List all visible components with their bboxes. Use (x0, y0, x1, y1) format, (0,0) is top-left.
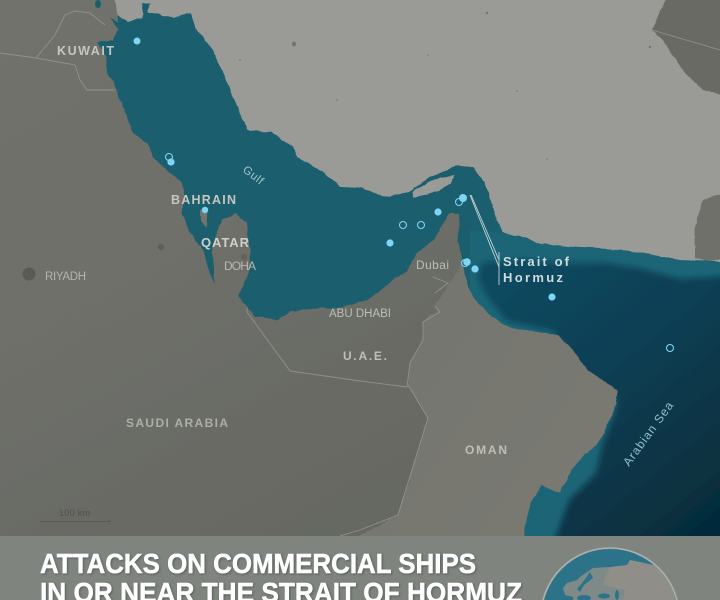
city: Riyadh urban area (22, 268, 36, 280)
label: RIYADH: RIYADH (45, 271, 86, 283)
title: ATTACKS ON COMMERCIAL SHIPS (40, 548, 476, 579)
label: QATAR: QATAR (201, 235, 250, 250)
land: Pakistan coast (695, 190, 720, 262)
city: Al Ain urban area (430, 308, 437, 314)
attack markers (134, 38, 674, 352)
label: Strait of Hormuz: Hormuz (503, 270, 564, 285)
label: U.A.E.: U.A.E. (343, 349, 387, 363)
land: specks on Iran (239, 12, 651, 160)
city: Hofuf urban area (158, 244, 164, 250)
label: Dubai: Dubai (416, 258, 449, 272)
label: BAHRAIN: BAHRAIN (171, 193, 236, 207)
label: OMAN: OMAN (465, 443, 507, 457)
label: Arabian Sea: Arabian Sea (620, 399, 676, 469)
globe land: Asia (603, 545, 700, 600)
land: Qeshm island (412, 175, 455, 197)
label: KUWAIT: KUWAIT (57, 44, 114, 58)
attack: filled dots (134, 38, 556, 301)
land: Iran (112, 0, 720, 262)
leader lines: Strait of Hormuz (470, 195, 499, 285)
label: ABU DHABI: ABU DHABI (329, 308, 391, 320)
sea: deep Arabian Sea (478, 259, 720, 545)
title (40, 548, 522, 600)
title panel (0, 536, 720, 600)
land: Saudi Arabia, Kuwait, Qatar, U.A.E. and Oman (0, 0, 617, 545)
sea: lighter coastal shelf, Gulf of Oman (470, 230, 720, 536)
scale bar (40, 510, 110, 522)
label: DOHA: DOHA (224, 259, 256, 273)
sea: shallow Gulf and shelf (97, 3, 508, 320)
globe outline (541, 548, 679, 600)
label: SAUDI ARABIA: SAUDI ARABIA (126, 416, 228, 430)
scale bar: 100 km (59, 508, 90, 518)
sea: small Iraq marsh (95, 0, 101, 8)
globe land: Europe (563, 567, 625, 600)
globe seas: Baltic, Mediterranean, Black Sea and Caspian (577, 572, 619, 600)
land: Oman tint (340, 263, 617, 545)
label: Strait of Hormuz (503, 256, 569, 282)
label: Strait of Hormuz: Strait of (503, 254, 570, 269)
panel background (0, 536, 720, 600)
land: Pakistan north (652, 0, 720, 96)
label: Gulf: Gulf (240, 164, 266, 188)
locator globe (542, 545, 700, 600)
land: Bahrain (200, 208, 207, 228)
globe ocean (542, 549, 678, 600)
city: Doha urban area (241, 254, 247, 260)
attack: ring markers (166, 154, 674, 352)
